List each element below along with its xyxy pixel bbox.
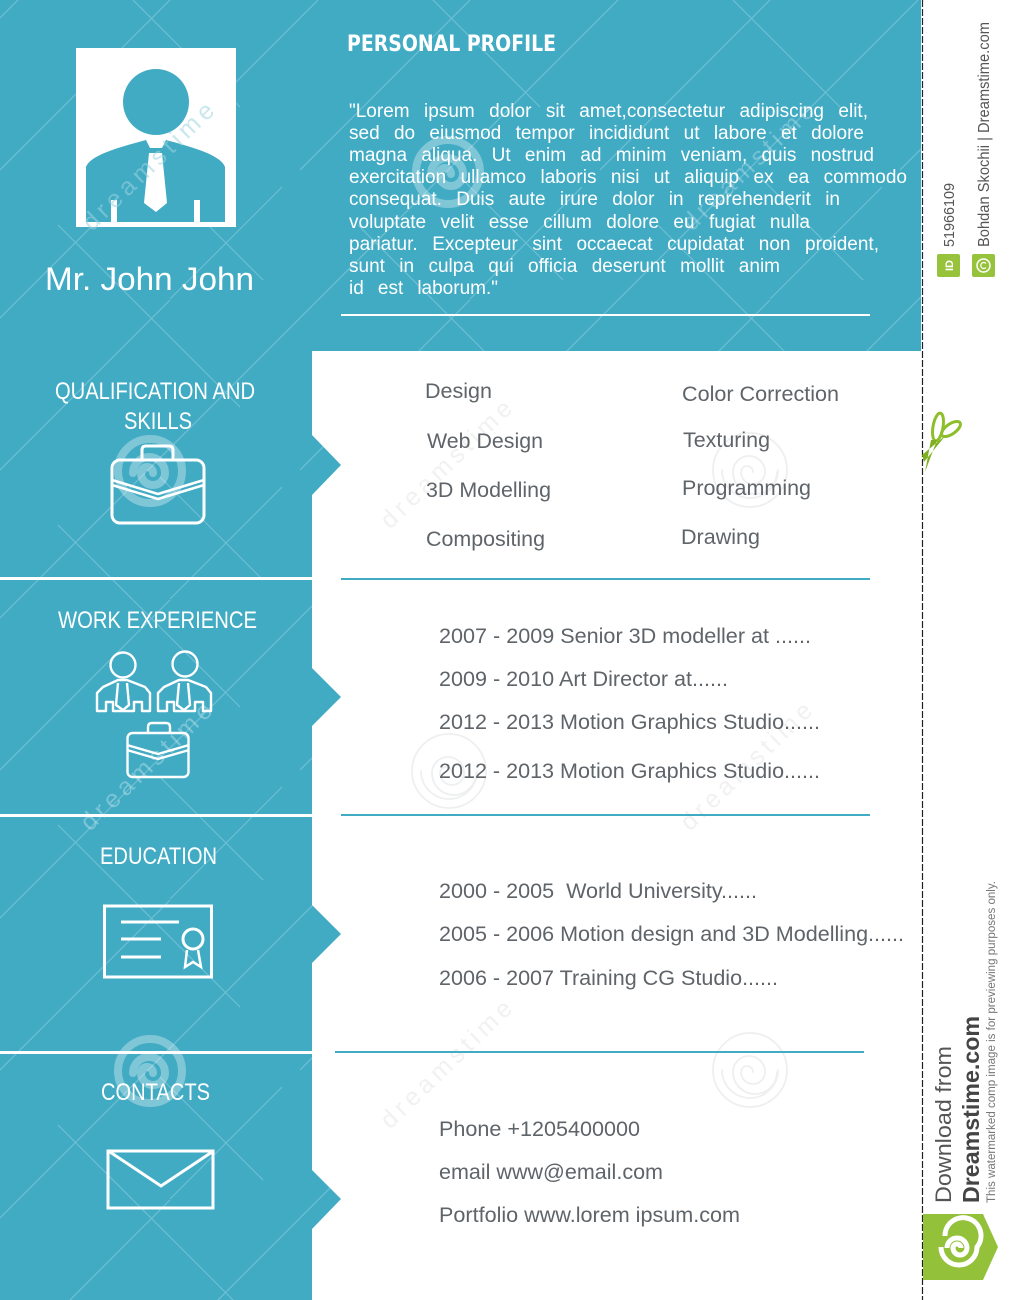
list: education: 2005 - 2006 Motion design and 3D Modelling...... [439, 922, 904, 946]
icon: envelope [108, 1151, 213, 1208]
panel: left sidebar with section arrows [0, 351, 341, 1300]
list: skills: Design [425, 379, 492, 403]
image id number: 51966109 [941, 183, 958, 247]
divider: sidebar three [0, 1051, 312, 1054]
text block: profile paragraph [349, 101, 907, 299]
text block: profile paragraph: exercitation ullamco laboris nisi ut aliquip ex ea commodo [349, 167, 907, 188]
watermark words: dreamstime [375, 395, 518, 534]
list: education: 2006 - 2007 Training CG Studio...... [439, 966, 778, 990]
download from: Download from [931, 1046, 956, 1203]
list: contacts [439, 1117, 740, 1227]
text block: profile paragraph: sunt in culpa qui officia deserunt mollit anim [349, 256, 780, 277]
panel: profile header background [0, 0, 921, 351]
author credit: Bohdan Skochii | Dreamstime.com [976, 22, 993, 247]
divider: skills [341, 578, 870, 580]
list: contacts: Phone +1205400000 [439, 1117, 640, 1141]
list: skills: 3D Modelling [426, 478, 551, 502]
text block: profile paragraph: "Lorem ipsum dolor sit amet,consectetur adipiscing elit, [349, 101, 868, 122]
cut line [922, 0, 924, 1300]
badge: id: ID [944, 260, 956, 271]
watermark words: dreamstime [375, 995, 518, 1134]
list: education: 2000 - 2005 World University...... [439, 879, 757, 903]
heading: contacts: CONTACTS [101, 1079, 210, 1106]
text block: profile paragraph: magna aliqua. Ut enim ad minim veniam, quis nostrud [349, 145, 874, 166]
list: work experience: 2012 - 2013 Motion Graphics Studio...... [439, 710, 820, 734]
text block: profile paragraph: pariatur. Excepteur sint occaecat cupidatat non proident, [349, 234, 879, 255]
list: skills: Texturing [683, 428, 770, 452]
watermark words [75, 97, 820, 1134]
text block: profile paragraph: voluptate velit esse cillum dolore eu fugiat nulla [349, 212, 810, 233]
list: work experience: 2009 - 2010 Art Director at...... [439, 667, 728, 691]
divider: work [341, 814, 870, 816]
name: Mr. John John [45, 261, 254, 297]
watermark notice: This watermarked comp image is for previewing purposes only. [986, 881, 998, 1203]
heading: qualification and skills [55, 378, 255, 435]
icon: certificate [104, 906, 212, 977]
icon: two people and briefcase [97, 652, 211, 777]
list: work experience: 2012 - 2013 Motion Graphics Studio...... [439, 759, 820, 783]
watermark words: dreamstime [77, 97, 220, 236]
list: skills [425, 379, 839, 551]
badge: copyright [972, 254, 995, 277]
list: skills: Compositing [426, 527, 545, 551]
list: skills: Color Correction [682, 382, 839, 406]
badge: id [937, 254, 960, 277]
text block: profile paragraph: id est laborum." [349, 278, 498, 299]
logo: green tag with spiral [923, 1214, 998, 1280]
list: skills: Web Design [427, 429, 543, 453]
divider: education [335, 1051, 864, 1053]
dreamstime brand: Dreamstime.com [958, 1016, 984, 1203]
watermark words: dreamstime [75, 697, 218, 836]
photo: person portrait [76, 48, 236, 227]
heading: qualification and skills: QUALIFICATION AND [55, 378, 255, 405]
list: skills: Drawing [681, 525, 760, 549]
text block: profile paragraph: sed do eiusmod tempor incididunt ut labore et dolore [349, 123, 864, 144]
list: work experience: 2007 - 2009 Senior 3D modeller at ...... [439, 624, 811, 648]
watermark words: dreamstime [677, 97, 820, 236]
icon: briefcase [112, 446, 204, 523]
list: education [439, 879, 904, 990]
watermark spirals [118, 140, 787, 1107]
divider: sidebar two [0, 814, 312, 817]
heading: qualification and skills: SKILLS [124, 408, 192, 435]
heading: education: EDUCATION [100, 843, 217, 870]
list: work experience [439, 624, 820, 783]
list: skills: Programming [682, 476, 811, 500]
list: contacts: Portfolio www.lorem ipsum.com [439, 1203, 740, 1227]
list: contacts: email www@email.com [439, 1160, 663, 1184]
heading: personal profile: PERSONAL PROFILE [347, 31, 556, 57]
icon: scissors [922, 412, 963, 472]
divider: sidebar one [0, 577, 312, 580]
divider: profile [341, 314, 870, 316]
watermark words: dreamstime [675, 697, 818, 836]
heading: work experience: WORK EXPERIENCE [58, 607, 257, 634]
text block: profile paragraph: consequat. Duis aute irure dolor in reprehenderit in [349, 189, 840, 210]
